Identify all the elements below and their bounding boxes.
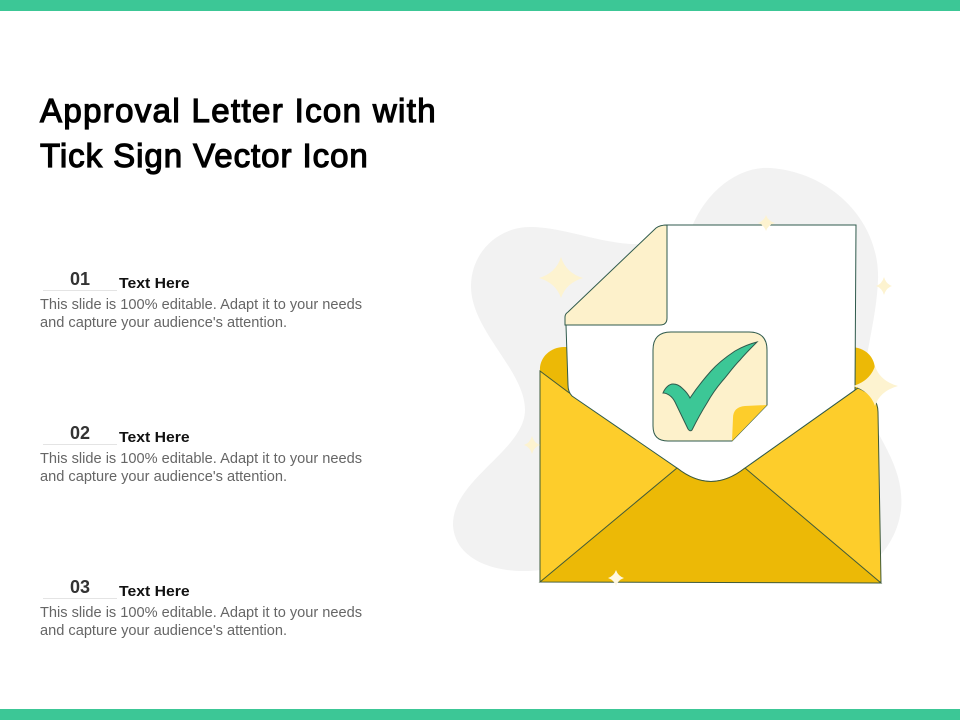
list item 01: and capture your audience's attention.	[40, 315, 287, 331]
sparkle left	[539, 257, 583, 298]
list item 02: This slide is 100% editable. Adapt it to your needs	[40, 451, 362, 467]
check badge	[653, 332, 767, 441]
letter sheet	[566, 225, 856, 482]
list item 03	[40, 577, 362, 639]
list item 03: 03	[70, 577, 90, 597]
list item 01	[40, 269, 362, 331]
sparkle right small	[876, 277, 892, 295]
bottom bar	[0, 709, 960, 720]
title: Tick Sign Vector Icon	[40, 137, 369, 174]
badge paper	[653, 332, 767, 441]
list item 01: This slide is 100% editable. Adapt it to your needs	[40, 297, 362, 313]
title: Approval Letter Icon with	[40, 92, 437, 129]
sparkles	[524, 215, 898, 586]
sparkle far left	[524, 436, 540, 454]
list item 02: Text Here	[119, 430, 190, 446]
sparkle bottom	[608, 570, 624, 586]
list item 02: 02	[70, 423, 90, 443]
sparkle top	[758, 215, 775, 231]
background blob	[453, 168, 901, 583]
envelope front flap	[540, 468, 881, 583]
top bar	[0, 0, 960, 11]
sparkle large right	[853, 366, 898, 406]
envelope side panels	[540, 371, 881, 582]
list item 03: This slide is 100% editable. Adapt it to your needs	[40, 605, 362, 621]
list item 03: Text Here	[119, 584, 190, 600]
list item 02: and capture your audience's attention.	[40, 469, 287, 485]
envelope back flap	[540, 347, 875, 400]
list item 03: and capture your audience's attention.	[40, 623, 287, 639]
list item 01: Text Here	[119, 276, 190, 292]
title	[39, 92, 437, 175]
list item 02	[40, 423, 362, 485]
letter corner fold	[565, 225, 667, 325]
list item 01: 01	[70, 269, 90, 289]
tick mark	[663, 342, 757, 431]
badge curled corner	[732, 405, 767, 441]
